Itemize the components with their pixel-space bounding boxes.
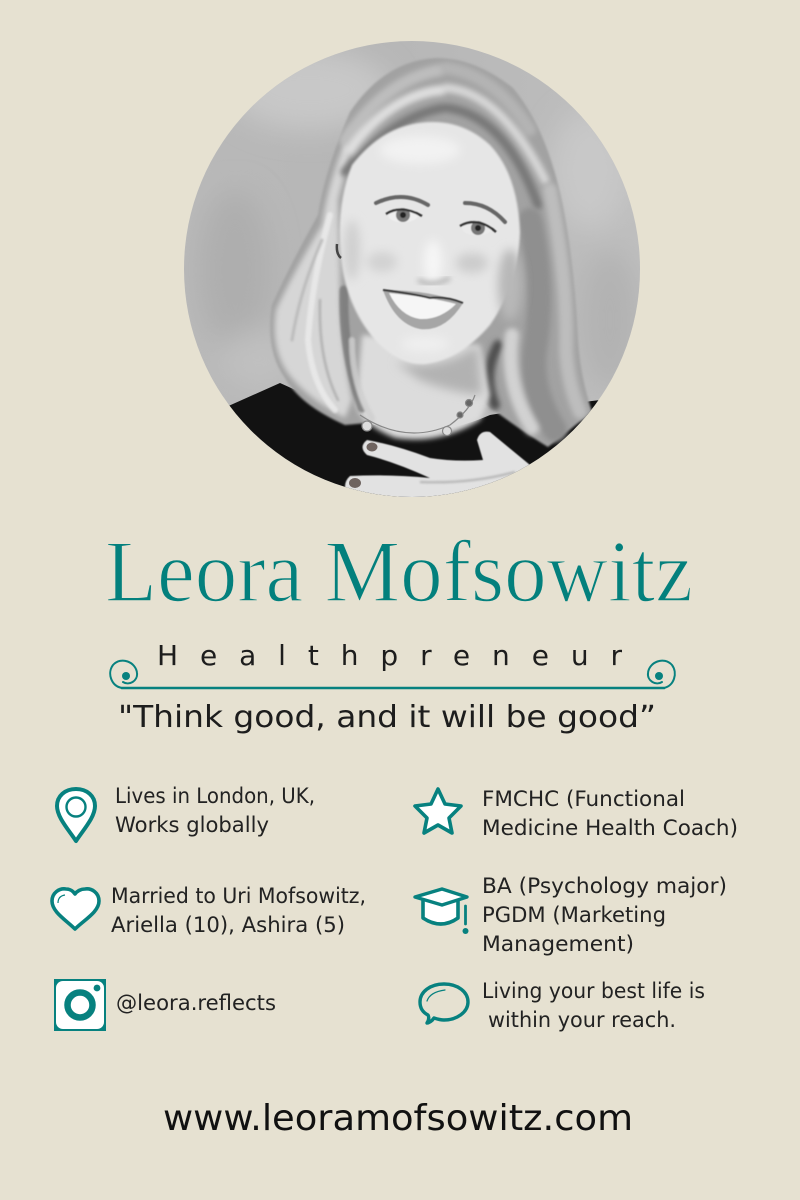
backdrop shading	[199, 50, 640, 390]
photo backdrop	[184, 41, 640, 497]
earring	[337, 244, 341, 258]
flourish divider	[110, 661, 675, 688]
text: certification: Medicine Health Coach)	[482, 816, 738, 840]
text: education: PGDM (Marketing	[482, 903, 666, 927]
icon: speech bubble	[420, 984, 468, 1023]
icon: heart	[52, 889, 99, 929]
text: education: Management)	[482, 932, 634, 956]
text: certification: FMCHC (Functional	[482, 787, 685, 811]
website url: www.leoramofsowitz.com	[163, 1098, 633, 1139]
text: certification	[482, 787, 738, 840]
icon: graduation cap	[415, 889, 468, 934]
face shading	[342, 139, 524, 320]
nose	[418, 278, 450, 284]
portrait photo	[184, 41, 640, 520]
necklace	[360, 395, 475, 436]
quote: "Think good, and it will be good”	[118, 700, 656, 735]
text: family: Ariella (10), Ashira (5)	[111, 913, 345, 937]
text: education: BA (Psychology major)	[482, 874, 727, 898]
neck shadow	[395, 345, 482, 395]
hair crown strands	[345, 68, 545, 205]
text: motto: within your reach.	[488, 1008, 676, 1032]
icon: star	[415, 789, 461, 833]
neck	[356, 335, 490, 440]
hair right side	[489, 190, 580, 430]
fingernails	[349, 442, 378, 488]
icon: instagram	[54, 979, 106, 1031]
text: education	[482, 874, 727, 956]
icon: location pin	[57, 789, 95, 841]
text: location	[115, 784, 315, 837]
text: location: Works globally	[115, 813, 269, 837]
finger shading	[420, 472, 515, 482]
text: motto: Living your best life is	[482, 979, 705, 1003]
infographic page	[50, 41, 736, 1130]
text: family	[111, 884, 366, 937]
hair strands left, over neck	[292, 215, 372, 418]
eyes	[386, 208, 496, 236]
hair light mass left	[275, 125, 352, 418]
hand	[345, 432, 530, 500]
name heading: Leora Mofsowitz	[105, 524, 693, 621]
text: instagram handle: @leora.reflects	[116, 991, 276, 1015]
text: family: Married to Uri Mofsowitz,	[111, 884, 366, 908]
text: motto	[482, 979, 705, 1032]
text: location: Lives in London, UK,	[115, 784, 315, 808]
hair mass	[270, 58, 592, 447]
eyebrows	[376, 197, 505, 222]
subtitle: Healthpreneur	[157, 639, 622, 672]
face	[340, 122, 520, 364]
black top	[230, 383, 598, 497]
smile	[383, 290, 463, 329]
hair parting	[442, 62, 446, 115]
